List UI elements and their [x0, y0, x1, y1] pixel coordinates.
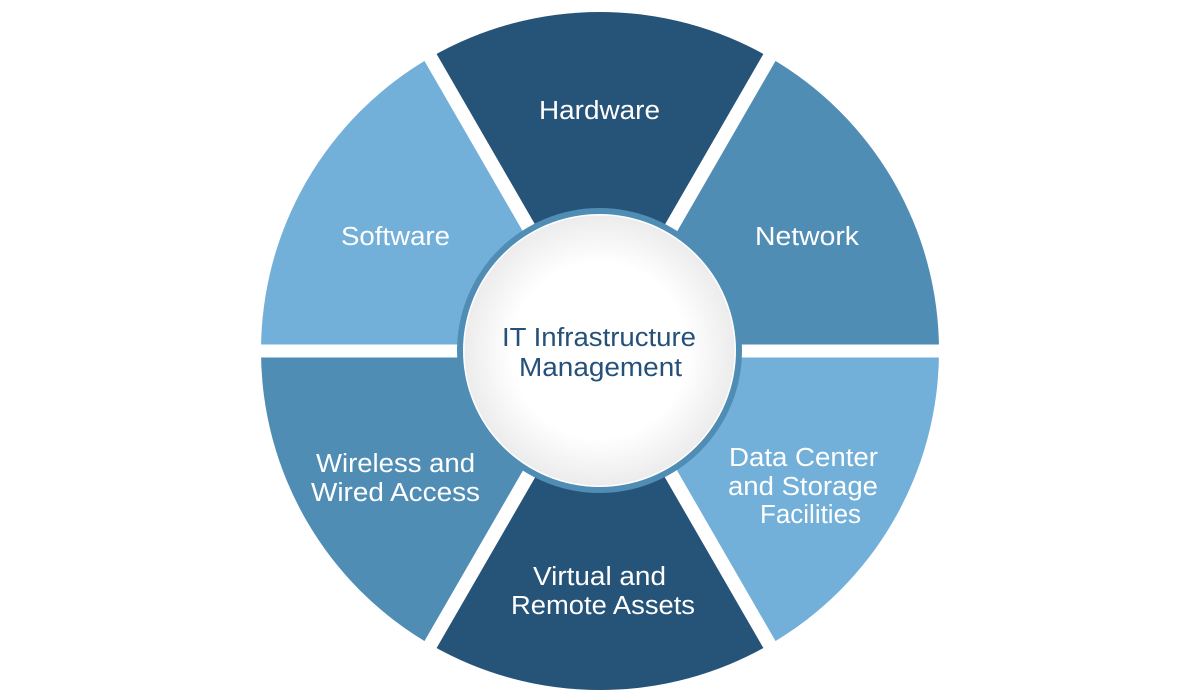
label: Virtual and Remote Assets: [511, 563, 695, 620]
label: Network: Network: [755, 223, 859, 251]
label: Data Center and Storage Facilities: Data Center: [729, 444, 879, 472]
segment: Wireless and Wired Access: [261, 351, 600, 645]
hub title: IT Infrastructure: [502, 324, 696, 352]
segment: Data Center and Storage Facilities: [600, 351, 939, 645]
segment: Software: [261, 57, 600, 351]
label: Data Center and Storage Facilities: and Storage: [728, 473, 878, 501]
center hub: [457, 208, 742, 493]
label: Wireless and Wired Access: Wired Access: [311, 479, 480, 507]
hub title: [502, 324, 696, 382]
label: Software: Software: [341, 223, 450, 251]
label: Data Center and Storage Facilities: [728, 444, 879, 529]
label: Wireless and Wired Access: [311, 450, 480, 507]
segment: Virtual and Remote Assets: [430, 351, 770, 690]
label: Hardware: Hardware: [539, 97, 660, 125]
label: Virtual and Remote Assets: Virtual and: [533, 563, 666, 591]
label: Wireless and Wired Access: Wireless and: [316, 450, 475, 478]
label: Data Center and Storage Facilities: Facilities: [760, 501, 861, 529]
label: Virtual and Remote Assets: Remote Assets: [511, 592, 695, 620]
segment: Hardware: [430, 12, 770, 351]
hub title: Management: [519, 354, 682, 382]
segment: Network: [600, 57, 939, 351]
